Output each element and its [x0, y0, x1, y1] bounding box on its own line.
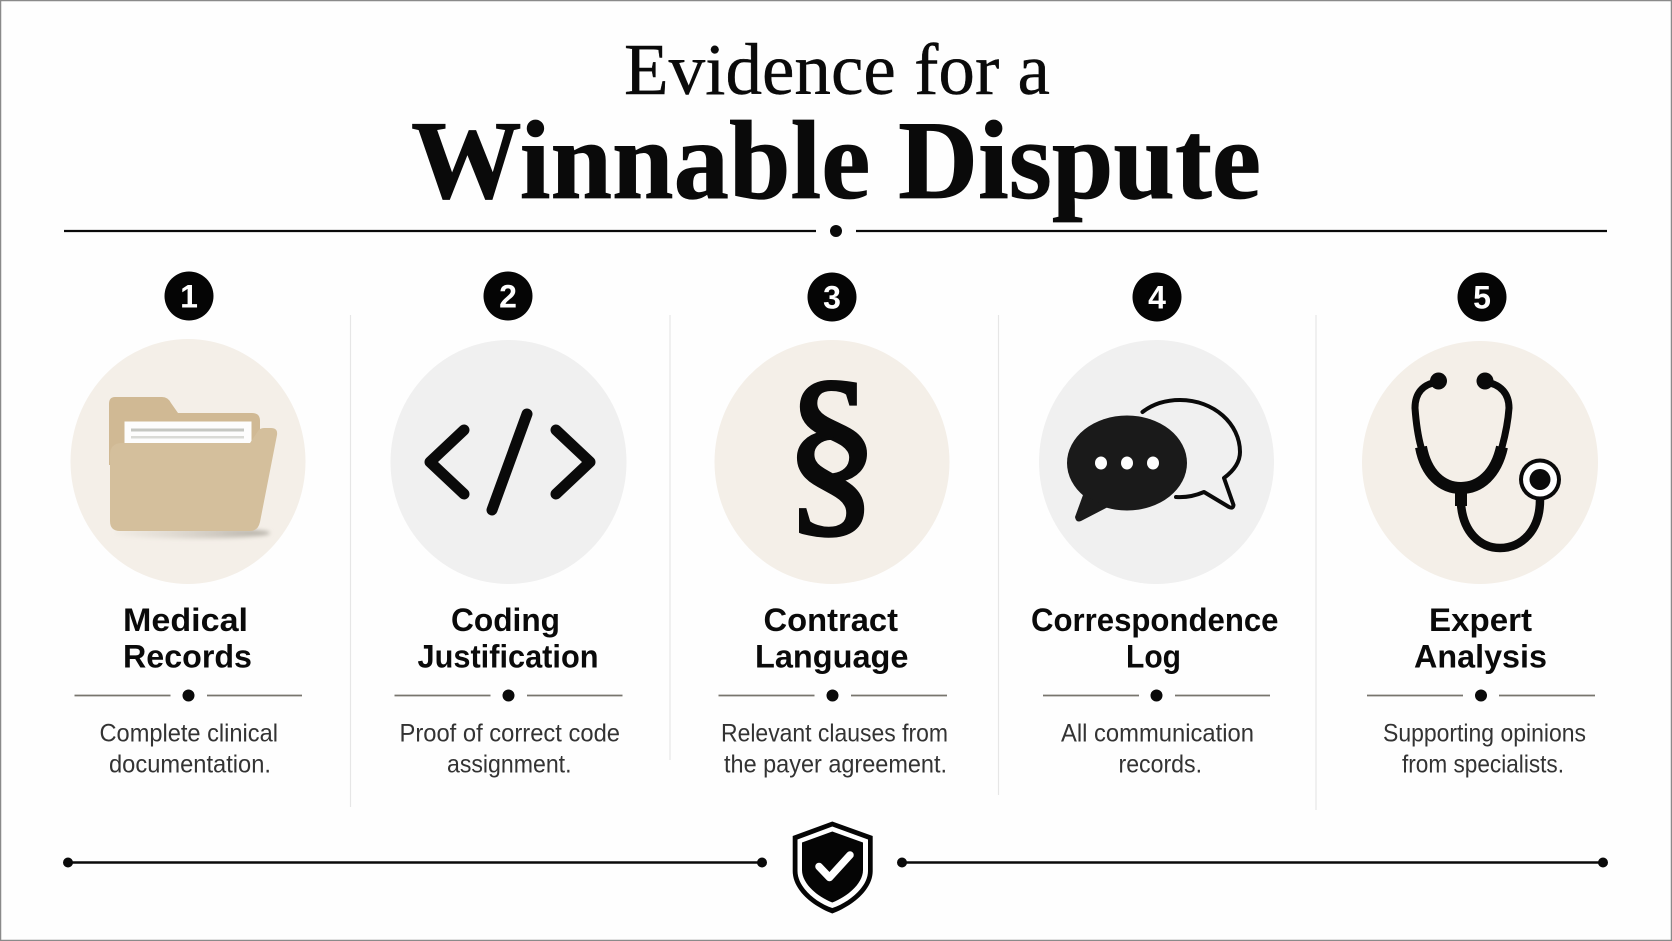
description: Supporting opinions — [1383, 720, 1586, 748]
heading: Log — [1126, 638, 1181, 674]
description — [100, 720, 278, 778]
panel: medical records — [70, 272, 306, 778]
heading: Justification — [418, 638, 598, 674]
number badge 1: 1 — [180, 278, 198, 314]
number badge 3: 3 — [823, 280, 841, 316]
description: from specialists. — [1402, 750, 1564, 778]
heading — [1031, 602, 1278, 674]
description: the payer agreement. — [724, 750, 947, 778]
icon: folder — [109, 397, 277, 538]
description — [1061, 720, 1254, 778]
title — [411, 29, 1261, 223]
description — [721, 720, 948, 778]
description: Complete clinical — [100, 720, 278, 748]
panel: expert analysis — [1362, 272, 1598, 778]
mini divider — [1043, 690, 1270, 702]
footer line right — [897, 858, 1608, 868]
description: Proof of correct code — [400, 720, 620, 748]
heading: Correspondence — [1031, 602, 1278, 638]
number badge 4 — [1132, 272, 1182, 322]
mini divider — [1367, 690, 1595, 702]
title line 2: Winnable Dispute — [411, 99, 1261, 223]
panel: correspondence log — [1031, 272, 1278, 778]
heading — [418, 602, 598, 674]
number badge 5 — [1458, 272, 1506, 322]
icon circle 5 — [1362, 341, 1598, 584]
title line 1: Evidence for a — [624, 29, 1050, 110]
description: Relevant clauses from — [721, 720, 948, 748]
header divider — [64, 225, 1607, 237]
mini divider — [74, 690, 302, 702]
panel: coding justification — [390, 272, 626, 778]
icon: code brackets — [430, 414, 590, 510]
heading — [123, 602, 252, 674]
icon circle 3 — [714, 340, 950, 584]
mini divider — [718, 690, 947, 702]
number badge 5: 5 — [1473, 280, 1491, 316]
heading: Coding — [451, 602, 560, 638]
description: assignment. — [447, 750, 572, 778]
number badge 3 — [808, 272, 856, 322]
heading: Medical — [123, 602, 248, 638]
heading: Records — [123, 638, 252, 674]
number badge 1 — [164, 272, 214, 320]
heading: Expert — [1429, 602, 1532, 638]
description: documentation. — [109, 750, 271, 778]
heading: Language — [755, 638, 908, 674]
icon: shield with check — [793, 822, 873, 914]
icon: stethoscope — [1415, 372, 1561, 548]
heading — [1414, 602, 1547, 674]
icon circle 4 — [1039, 340, 1274, 584]
number badge 2 — [484, 272, 532, 320]
description — [1383, 720, 1586, 778]
number badge 4: 4 — [1148, 280, 1166, 316]
icon circle 2 — [390, 340, 626, 584]
number badge 2: 2 — [499, 278, 517, 314]
heading — [755, 602, 908, 674]
heading: Analysis — [1414, 638, 1547, 674]
footer line left — [63, 858, 767, 868]
mini divider — [394, 690, 622, 702]
icon circle 1 — [70, 339, 306, 584]
icon: speech bubbles — [1067, 400, 1240, 522]
heading: Contract — [764, 602, 898, 638]
description — [400, 720, 620, 778]
icon: section sign: § — [784, 341, 880, 554]
description: All communication — [1061, 720, 1254, 748]
panel: contract language — [714, 272, 950, 778]
description: records. — [1118, 750, 1202, 778]
